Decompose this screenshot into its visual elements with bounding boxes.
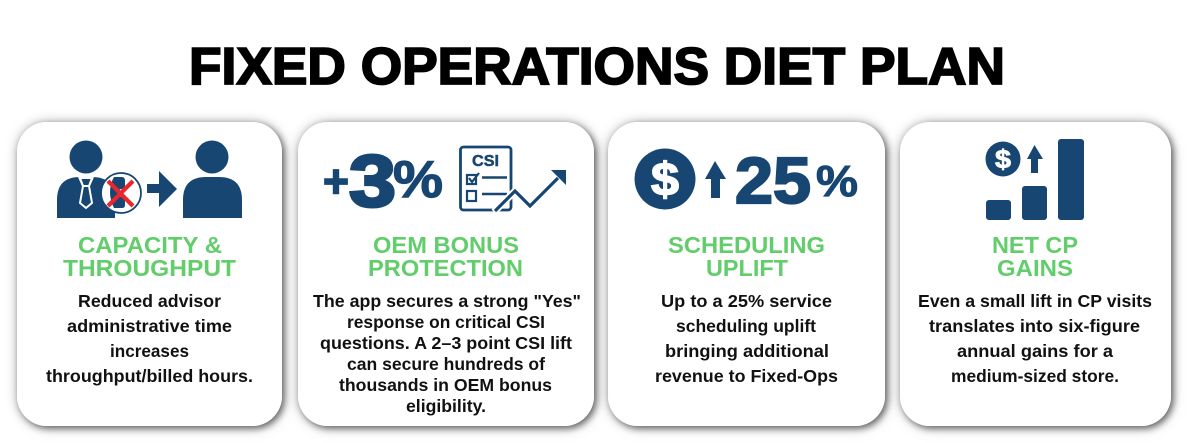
icon: dollar up 25 percent: $ [651,153,679,205]
body text: The app secures a strong "Yes" [313,291,581,311]
card background [900,122,1171,426]
panel: OEM bonus protection [298,122,594,426]
heading: NET CP [992,232,1078,258]
card background [608,122,885,426]
body text [918,291,1152,386]
card background [17,122,282,426]
body text: Even a small lift in CP visits [918,291,1152,311]
panel: net CP gains [900,122,1171,426]
body text [46,291,253,386]
icon: dollar up 25 percent: % [816,157,858,206]
heading [63,232,237,281]
body text: medium-sized store. [951,366,1119,386]
body text: response on critical CSI [347,312,545,332]
body text: bringing additional [665,341,829,361]
body text: increases [110,341,189,361]
body text: questions. A 2–3 point CSI lift [320,333,572,353]
icon: plus 3 percent with CSI checklist and rising arrow: 3 [349,141,396,222]
icon: plus 3 percent with CSI checklist and rising arrow [323,141,566,222]
heading: GAINS [997,255,1073,281]
heading: UPLIFT [706,255,789,281]
panel: capacity and throughput [17,122,282,426]
icon: plus 3 percent with CSI checklist and rising arrow: CSI [472,153,499,170]
icon: plus 3 percent with CSI checklist and rising arrow: + [323,155,349,207]
title: FIXED OPERATIONS DIET PLAN [189,38,1005,96]
body text: revenue to Fixed-Ops [655,366,838,386]
body text: Reduced advisor [78,291,221,311]
body text: annual gains for a [957,341,1113,361]
heading: OEM BONUS [373,232,519,258]
heading: SCHEDULING [668,232,825,258]
body text: can secure hundreds of [347,354,545,374]
heading: CAPACITY & [78,232,222,258]
icon: dollar up 25 percent: 25 [735,144,811,217]
body text: Up to a 25% service [661,291,832,311]
body text: translates into six-figure [929,316,1140,336]
body text: throughput/billed hours. [46,366,253,386]
icon: dollar, up arrow and rising bars [986,139,1084,220]
heading: THROUGHPUT [63,255,237,281]
body text: scheduling uplift [676,316,816,336]
card background [298,122,594,426]
heading [992,232,1078,281]
body text [313,291,581,416]
icon: plus 3 percent with CSI checklist and rising arrow: % [393,151,443,209]
icon: advisor with crossed-out phone becomes person [57,140,242,218]
body text [655,291,838,386]
body text: eligibility. [406,396,486,416]
body text: thousands in OEM bonus [339,375,552,395]
heading [668,232,825,281]
icon: dollar, up arrow and rising bars: $ [995,144,1012,174]
heading: PROTECTION [368,255,523,281]
heading [368,232,523,281]
body text: administrative time [67,316,232,336]
icon: dollar up 25 percent [634,144,858,217]
panel: scheduling uplift [608,122,885,426]
